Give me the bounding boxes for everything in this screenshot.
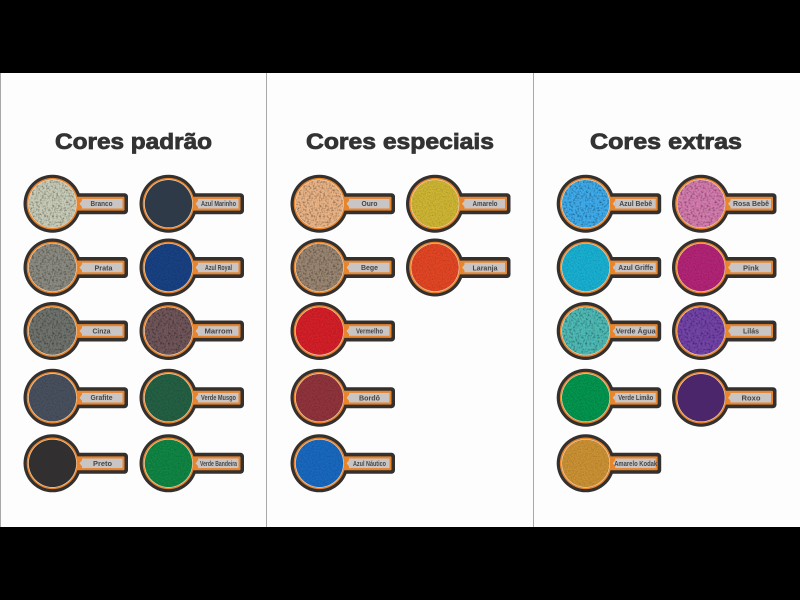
swatch: Ouro: Ouro bbox=[362, 199, 378, 208]
panel: cores extras bbox=[534, 73, 800, 527]
swatch: Azul Royal: Azul Royal bbox=[205, 263, 232, 272]
panel: cores padrão bbox=[0, 73, 267, 527]
swatch: Prata: Prata bbox=[94, 263, 113, 272]
heading: cores extras: Cores extras bbox=[590, 129, 742, 154]
swatch: Azul Griffe bbox=[557, 238, 661, 296]
heading: cores especiais: Cores especiais bbox=[306, 129, 494, 154]
swatch: Lilás bbox=[672, 302, 776, 360]
swatch: Azul Royal bbox=[140, 238, 244, 296]
swatch: Marrom bbox=[140, 302, 244, 360]
swatch: Azul Náutico: Azul Náutico bbox=[353, 459, 386, 468]
swatch: Verde Bandeira: Verde Bandeira bbox=[200, 459, 238, 468]
swatch: Prata bbox=[24, 238, 128, 296]
swatch: Azul Bebê bbox=[557, 175, 661, 233]
swatch: Lilás: Lilás bbox=[743, 326, 759, 336]
swatch: Amarelo Kodak bbox=[557, 434, 661, 492]
swatch: Verde Musgo bbox=[140, 369, 244, 427]
swatch: Verde Limão bbox=[557, 369, 661, 427]
swatch: Grafite: Grafite bbox=[90, 393, 112, 402]
swatch: Roxo: Roxo bbox=[742, 394, 761, 403]
swatch: Vermelho bbox=[290, 302, 395, 360]
swatch: Grafite bbox=[24, 369, 128, 427]
swatch: Laranja bbox=[406, 238, 510, 296]
swatch: Azul Náutico bbox=[290, 434, 395, 492]
swatch: Bege: Bege bbox=[361, 263, 378, 272]
swatch: Bordô bbox=[290, 369, 395, 427]
swatch: Preto: Preto bbox=[93, 459, 112, 468]
swatch: Branco: Branco bbox=[90, 199, 113, 208]
swatch: Amarelo Kodak: Amarelo Kodak bbox=[614, 459, 658, 468]
swatch: Pink bbox=[672, 238, 776, 296]
swatch: Verde Limão: Verde Limão bbox=[618, 393, 654, 402]
swatch: Azul Marinho bbox=[140, 175, 244, 233]
swatch: Ouro bbox=[290, 175, 395, 233]
heading: cores padrão: Cores padrão bbox=[55, 129, 212, 154]
swatch: Pink: Pink bbox=[743, 263, 760, 272]
swatch: Bege bbox=[290, 238, 395, 296]
swatch: Branco bbox=[24, 175, 128, 233]
swatch: Amarelo: Amarelo bbox=[472, 199, 498, 208]
swatch: Verde Água bbox=[557, 302, 661, 360]
swatch: Vermelho: Vermelho bbox=[356, 326, 383, 336]
swatch: Cinza: Cinza bbox=[92, 326, 111, 336]
panel: cores especiais bbox=[267, 73, 534, 527]
swatch: Roxo bbox=[672, 369, 776, 427]
swatch: Verde Bandeira bbox=[140, 434, 244, 492]
swatch: Verde Musgo: Verde Musgo bbox=[201, 393, 236, 402]
swatch: Preto bbox=[24, 434, 128, 492]
swatch: Bordô: Bordô bbox=[359, 394, 380, 403]
swatch: Rosa Bebê: Rosa Bebê bbox=[733, 199, 769, 208]
swatch: Azul Marinho: Azul Marinho bbox=[201, 199, 236, 208]
swatch: Marrom: Marrom bbox=[204, 326, 233, 336]
swatch: Laranja: Laranja bbox=[472, 263, 498, 272]
swatch: Azul Bebê: Azul Bebê bbox=[619, 199, 652, 208]
swatch: Azul Griffe: Azul Griffe bbox=[618, 263, 653, 272]
swatch: Rosa Bebê bbox=[672, 175, 776, 233]
swatch: Amarelo bbox=[406, 175, 510, 233]
swatch: Verde Água: Verde Água bbox=[616, 326, 657, 336]
swatch: Cinza bbox=[24, 302, 128, 360]
